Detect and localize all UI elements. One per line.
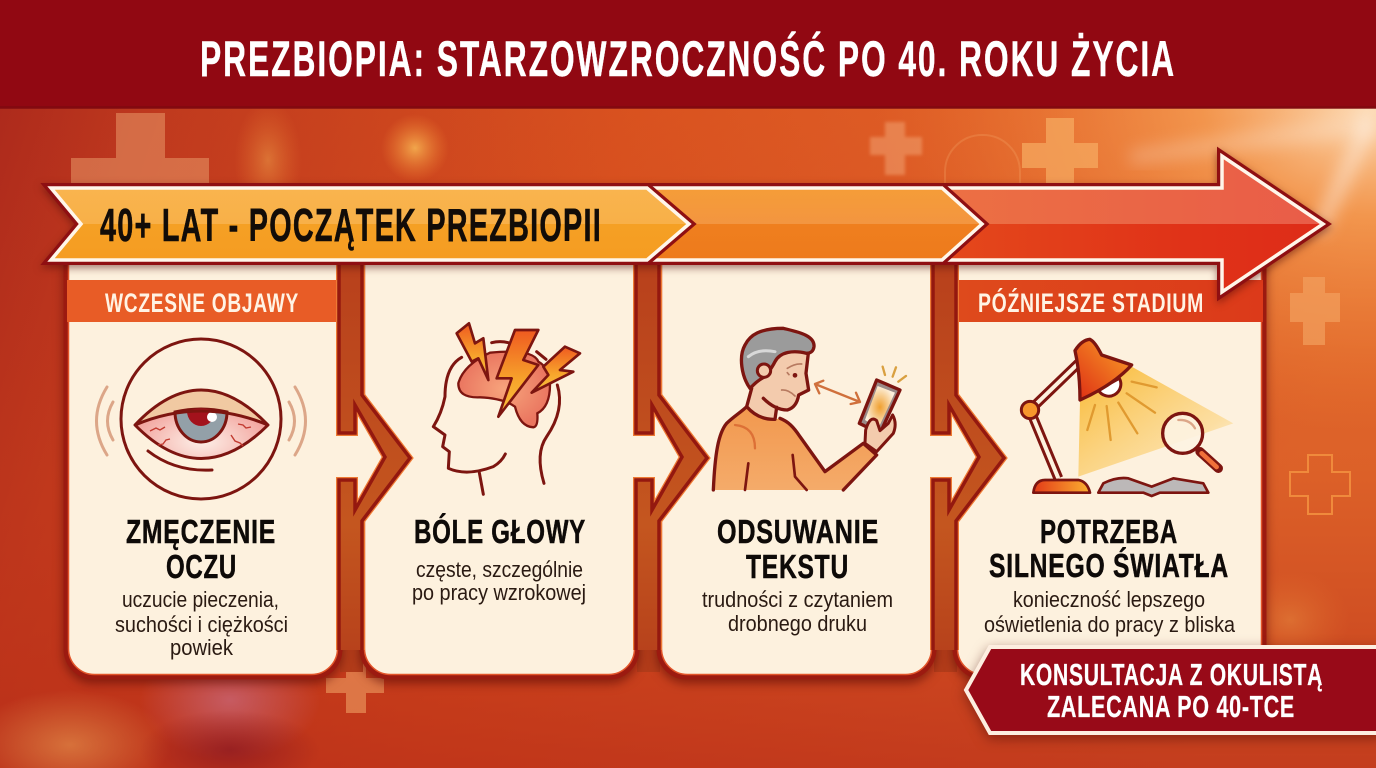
card 4 title <box>989 513 1229 584</box>
card 1 title: OCZU <box>166 548 237 585</box>
banner label: 40+ LAT - POCZĄTEK PREZBIOPII <box>100 199 602 251</box>
panel: card 4 <box>955 240 1264 677</box>
icon: head with brain and lightning <box>433 323 580 494</box>
arrow segment 3 <box>640 156 1323 292</box>
panel: card 2 <box>362 240 637 677</box>
card 2 title: BÓLE GŁOWY <box>414 513 586 550</box>
card 3 title: ODSUWANIE <box>717 513 879 550</box>
card 4 description <box>984 587 1235 637</box>
card 3 title: TEKSTU <box>746 548 849 585</box>
panel: card 1 <box>66 240 340 677</box>
icon: desk lamp, book and magnifier <box>1021 339 1233 496</box>
card 3 title <box>717 513 879 585</box>
callout <box>966 647 1376 733</box>
panel: card 3 <box>659 240 934 677</box>
gap strips behind cards <box>340 560 957 672</box>
icon: tired red eye <box>96 339 306 499</box>
card 3 description: trudności z czytaniem <box>702 587 893 612</box>
card 4 badge: PÓŹNIEJSZE STADIUM <box>978 287 1204 318</box>
card 1 title: ZMĘCZENIE <box>126 513 276 550</box>
card 1 description <box>115 587 288 660</box>
header bar <box>0 0 1376 109</box>
card 3 description: drobnego druku <box>728 611 867 636</box>
card 2 description <box>412 557 586 605</box>
timeline arrow <box>51 156 1323 292</box>
card 1 badge: WCZESNE OBJAWY <box>105 288 299 318</box>
card 4 title: SILNEGO ŚWIATŁA <box>989 547 1229 584</box>
card 4 description: oświetlenia do pracy z bliska <box>984 612 1235 637</box>
arrow: card 2 to card 3 <box>631 262 707 700</box>
icon: man holding phone away <box>713 328 906 490</box>
arrow: card 1 to card 2 <box>334 262 410 700</box>
card 4 badge <box>956 280 1263 322</box>
decorative crosses <box>71 113 1350 713</box>
card 2 description: po pracy wzrokowej <box>412 580 586 605</box>
card 1 badge <box>67 280 339 322</box>
arrow segment 1 <box>51 188 689 260</box>
card 1 title <box>126 513 276 585</box>
card 2 description: częste, szczególnie <box>416 557 583 582</box>
card 1 description: powiek <box>170 635 234 660</box>
card 4 title: POTRZEBA <box>1040 513 1178 550</box>
arrow: card 3 to card 4 <box>928 262 1004 700</box>
card 4 description: konieczność lepszego <box>1013 587 1205 612</box>
card 1 description: suchości i ciężkości <box>115 612 288 637</box>
card 3 description <box>702 587 893 636</box>
card 1 description: uczucie pieczenia, <box>122 587 279 612</box>
arrow segment 2 <box>640 188 982 260</box>
